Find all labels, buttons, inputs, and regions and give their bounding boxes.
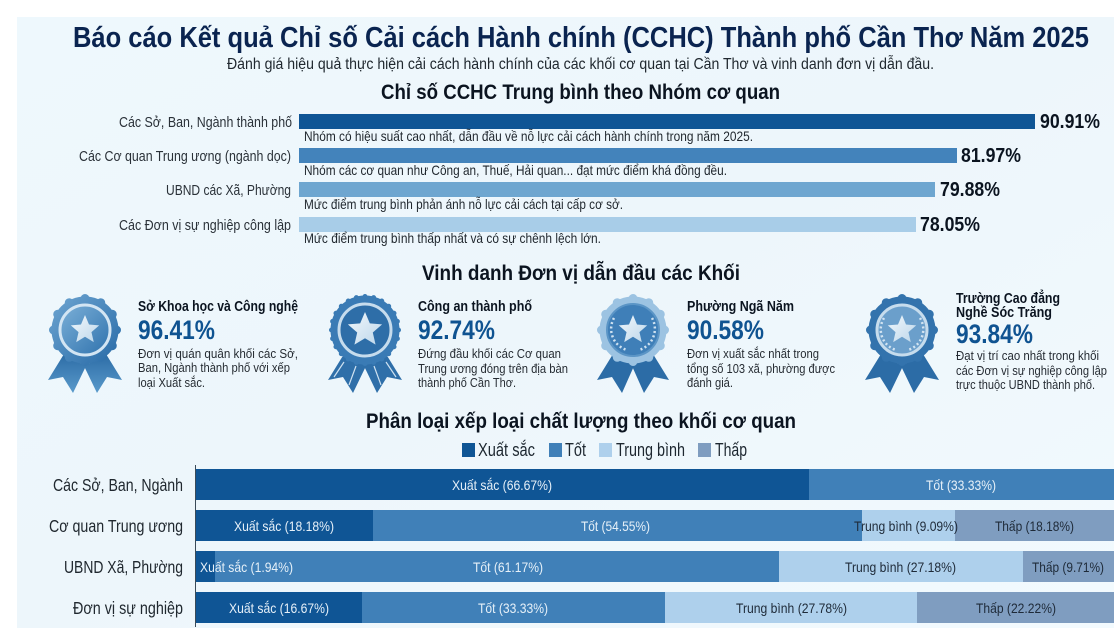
heading: quality classification: Phân loại xếp loại chất lượng theo khối cơ quan [366, 410, 796, 433]
icon: medal 1 [48, 296, 122, 393]
award: Sở Khoa học và Công nghệ: Sở Khoa học và Công nghệ [138, 299, 298, 315]
stacked row: Các Sở, Ban, Ngành [53, 469, 1114, 500]
bar row: UBND các Xã, Phường: 79.88% [940, 179, 1000, 201]
award: Phường Ngã Năm: đánh giá. [687, 375, 733, 390]
stacked row: Các Sở, Ban, Ngành: Các Sở, Ban, Ngành [53, 475, 183, 495]
award: Phường Ngã Năm: 90.58% [687, 315, 764, 345]
bar row: UBND các Xã, Phường: Mức điểm trung bình phản ánh nỗ lực cải cách tại cấp cơ sở. [304, 196, 623, 212]
heading: average index: Chỉ số CCHC Trung bình theo Nhóm cơ quan [381, 81, 780, 104]
stacked row: Đơn vị sự nghiệp: Tốt (33.33%) [478, 600, 548, 616]
bar chart: average CCHC index by group [79, 111, 1100, 246]
bar row: Các Đơn vị sự nghiệp công lập: Mức điểm trung bình thấp nhất và có sự chênh lệch lớn. [304, 230, 601, 246]
award: Công an thành phố: thành phố Cần Thơ. [418, 375, 516, 390]
stacked row: Đơn vị sự nghiệp [73, 592, 1114, 623]
icon: medal 4 [865, 296, 939, 393]
bar row: Các Đơn vị sự nghiệp công lập: 78.05% [920, 214, 980, 236]
icon: medal 3 [597, 296, 669, 393]
stacked row: Cơ quan Trung ương [49, 510, 1114, 541]
award: Công an thành phố: Trung ương đóng trên địa bàn [418, 361, 568, 376]
stacked row: Đơn vị sự nghiệp: Thấp (22.22%) [976, 600, 1056, 616]
award: Công an thành phố: Đứng đầu khối các Cơ quan [418, 346, 561, 361]
legend: Xuất sắc [478, 439, 535, 460]
stacked row: Các Sở, Ban, Ngành: Tốt (33.33%) [926, 477, 996, 493]
stacked row: Đơn vị sự nghiệp: Xuất sắc (16.67%) [229, 600, 329, 616]
bar row: UBND các Xã, Phường: UBND các Xã, Phường [166, 182, 291, 199]
legend: Tốt [565, 440, 586, 460]
award: Trường Cao đẳng Nghề Sóc Trăng: Nghề Sóc Trăng [956, 305, 1052, 321]
heading: leaders: Vinh danh Đơn vị dẫn đầu các Khối [422, 261, 740, 285]
bar row: Các Sở, Ban, Ngành thành phố: Nhóm có hiệu suất cao nhất, dẫn đầu về nỗ lực cải cách hành chính trong năm 2025. [304, 128, 753, 144]
award: Sở Khoa học và Công nghệ: loại Xuất sắc. [138, 375, 205, 390]
stacked row: UBND Xã, Phường: Tốt (61.17%) [473, 559, 543, 575]
bar row: Các Cơ quan Trung ương: 81.97% [961, 145, 1021, 167]
stacked row: Cơ quan Trung ương: Thấp (18.18%) [995, 518, 1074, 534]
stacked row: UBND Xã, Phường: Trung bình (27.18%) [845, 559, 956, 575]
subtitle: Đánh giá hiệu quả thực hiện cải cách hành chính của các khối cơ quan tại Cần Thơ và vinh danh đơn vị dẫn đầu. [227, 56, 934, 73]
stacked row: Cơ quan Trung ương: Tốt (54.55%) [581, 518, 650, 534]
award: Phường Ngã Năm: Đơn vị xuất sắc nhất trong [687, 346, 819, 361]
award: Phường Ngã Năm [597, 296, 835, 393]
legend: Trung bình [616, 440, 685, 460]
bar row: Các Cơ quan Trung ương: Nhóm các cơ quan như Công an, Thuế, Hải quan... đạt mức điểm khá đồng đều. [304, 162, 727, 178]
bar row: Các Cơ quan Trung ương: Các Cơ quan Trung ương (ngành dọc) [79, 148, 291, 165]
award: Trường Cao đẳng Nghề Sóc Trăng: Đạt vị trí cao nhất trong khối [956, 348, 1099, 363]
bar row: Các Đơn vị sự nghiệp công lập: Các Đơn vị sự nghiệp công lập [119, 217, 291, 234]
stacked row: UBND Xã, Phường [64, 551, 1114, 582]
bar row: Các Cơ quan Trung ương [79, 145, 1021, 178]
bar row: Các Đơn vị sự nghiệp công lập [119, 214, 980, 246]
legend: Thấp [715, 440, 747, 460]
bar row: Các Sở, Ban, Ngành thành phố: 90.91% [1040, 111, 1100, 133]
stacked row: Các Sở, Ban, Ngành: Xuất sắc (66.67%) [452, 477, 552, 493]
stacked row: Cơ quan Trung ương: Cơ quan Trung ương [49, 516, 183, 536]
award: Trường Cao đẳng Nghề Sóc Trăng [865, 289, 1107, 393]
stacked row: Cơ quan Trung ương: Trung bình (9.09%) [854, 518, 958, 534]
award: Trường Cao đẳng Nghề Sóc Trăng: Trường Cao đẳng [956, 289, 1060, 307]
stacked row: UBND Xã, Phường: Xuất sắc (1.94%) [200, 559, 293, 575]
award: Sở Khoa học và Công nghệ: 96.41% [138, 315, 215, 345]
legend [462, 439, 747, 460]
stacked row: Đơn vị sự nghiệp: Trung bình (27.78%) [736, 600, 847, 616]
award: Công an thành phố: Công an thành phố [418, 299, 532, 315]
award: Trường Cao đẳng Nghề Sóc Trăng: 93.84% [956, 319, 1033, 349]
stacked row: UBND Xã, Phường: UBND Xã, Phường [64, 557, 183, 577]
stacked row: Cơ quan Trung ương: Xuất sắc (18.18%) [234, 518, 334, 534]
award: Công an thành phố: 92.74% [418, 315, 495, 345]
award: Sở Khoa học và Công nghệ: Ban, Ngành thành phố với xếp [138, 360, 290, 375]
award: Phường Ngã Năm: tổng số 103 xã, phường được [687, 361, 835, 376]
bar row: Các Sở, Ban, Ngành thành phố [119, 111, 1100, 144]
stacked row: Đơn vị sự nghiệp: Đơn vị sự nghiệp [73, 598, 183, 618]
award: Sở Khoa học và Công nghệ [48, 296, 298, 393]
award: Phường Ngã Năm: Phường Ngã Năm [687, 299, 794, 315]
award: Sở Khoa học và Công nghệ: Đơn vị quán quân khối các Sở, [138, 346, 298, 361]
bar row: Các Sở, Ban, Ngành thành phố: Các Sở, Ban, Ngành thành phố [119, 114, 293, 131]
icon: medal 2 [328, 296, 402, 393]
stacked bar chart: quality classification [49, 465, 1114, 627]
award: Công an thành phố [328, 296, 568, 393]
bar row: UBND các Xã, Phường [166, 179, 1000, 212]
